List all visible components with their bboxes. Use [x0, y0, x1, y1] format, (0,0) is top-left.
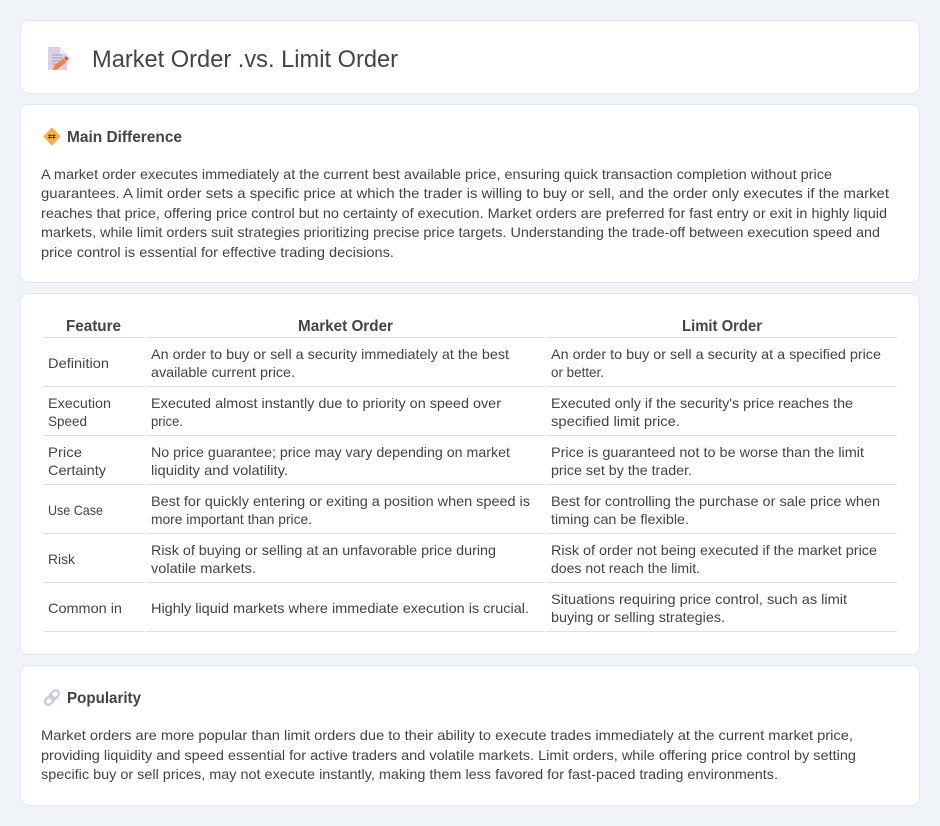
table header: Market Order — [298, 318, 393, 335]
row: common in: Highly liquid markets where immediate execution is crucial. — [151, 600, 529, 616]
row: risk: Risk of buying or selling at an unfavorable price during — [151, 542, 496, 558]
row: definition: Definition — [48, 355, 109, 371]
text block: main difference: A market order executes immediately at the current best available price, ensuring quick transaction completion without price — [41, 166, 832, 182]
row: use case: Best for controlling the purchase or sale price when — [551, 493, 880, 509]
text block: main difference — [41, 166, 889, 260]
row: price certainty: No price guarantee; price may vary depending on market — [151, 444, 510, 460]
text block: main difference: markets, while limit orders suit strategies prioritizing precise price targets. Understanding the trade-off between execution speed and — [41, 224, 880, 240]
row: execution speed: Speed — [48, 413, 87, 429]
row: definition: available current price. — [151, 364, 295, 380]
text block: popularity: specific buy or sell prices, may not execute instantly, making them less favored for fast-paced trading environments. — [41, 766, 778, 782]
text block: main difference: guarantees. A limit order sets a specific price at which the trader is willing to buy or sell, and the order only executes if the market — [41, 185, 889, 201]
row: execution speed: price. — [151, 413, 183, 429]
row: execution speed — [48, 395, 853, 429]
panel: main difference — [20, 104, 920, 282]
row: common in — [48, 591, 847, 625]
text block: popularity — [41, 727, 856, 782]
panel: popularity — [20, 666, 920, 806]
text block: popularity: Market orders are more popular than limit orders due to their ability to execute trades immediately at the current market price, — [41, 727, 853, 743]
heading: main difference: Main Difference — [67, 129, 182, 146]
icon: document with pencil — [48, 47, 69, 70]
row: common in: Situations requiring price control, such as limit — [551, 591, 847, 607]
table grid lines — [43, 338, 897, 632]
icon: warning diamond — [44, 128, 60, 145]
table header: Feature — [66, 318, 121, 335]
row: risk: does not reach the limit. — [551, 560, 700, 576]
row: use case: Use Case — [48, 502, 103, 518]
row: use case: timing can be flexible. — [551, 511, 689, 527]
row: risk — [48, 542, 877, 576]
row: execution speed: Executed only if the security's price reaches the — [551, 395, 853, 411]
row: execution speed: Executed almost instantly due to priority on speed over — [151, 395, 501, 411]
icon: link — [44, 689, 60, 706]
row: risk: Risk of order not being executed if the market price — [551, 542, 877, 558]
row: price certainty — [48, 444, 864, 478]
title text: Market Order .vs. Limit Order — [92, 46, 398, 73]
table header: Limit Order — [682, 318, 762, 335]
row: price certainty: Price — [48, 444, 82, 460]
row: use case: Best for quickly entering or exiting a position when speed is — [151, 493, 530, 509]
row: risk: Risk — [48, 551, 76, 567]
row: use case — [48, 493, 880, 527]
row: execution speed: Execution — [48, 395, 111, 411]
row: price certainty: liquidity and volatility. — [151, 462, 288, 478]
panel: comparison table — [20, 294, 920, 654]
row: price certainty: price set by the trader. — [551, 462, 692, 478]
text block: main difference: reaches that price, offering price control but no certainty of execution. Market orders are preferred for fast entry or exit in highly liquid — [41, 205, 887, 221]
text block: main difference: price control is essential for effective trading decisions. — [41, 244, 394, 260]
panel: title — [20, 20, 920, 94]
row: definition: An order to buy or sell a security immediately at the best — [151, 346, 509, 362]
row: definition — [48, 346, 881, 380]
row: use case: more important than price. — [151, 511, 312, 527]
heading: popularity: Popularity — [67, 690, 141, 707]
row: price certainty: Certainty — [48, 462, 106, 478]
row: price certainty: Price is guaranteed not to be worse than the limit — [551, 444, 864, 460]
row: definition: or better. — [551, 364, 604, 380]
table header — [66, 318, 762, 335]
row: definition: An order to buy or sell a security at a specified price — [551, 346, 881, 362]
row: execution speed: specified limit price. — [551, 413, 680, 429]
text block: popularity: providing liquidity and speed essential for active traders and volatile markets. Limit orders, while offering price control by setting — [41, 747, 856, 763]
row: common in: Common in — [48, 600, 122, 616]
row: risk: volatile markets. — [151, 560, 256, 576]
row: common in: buying or selling strategies. — [551, 609, 725, 625]
